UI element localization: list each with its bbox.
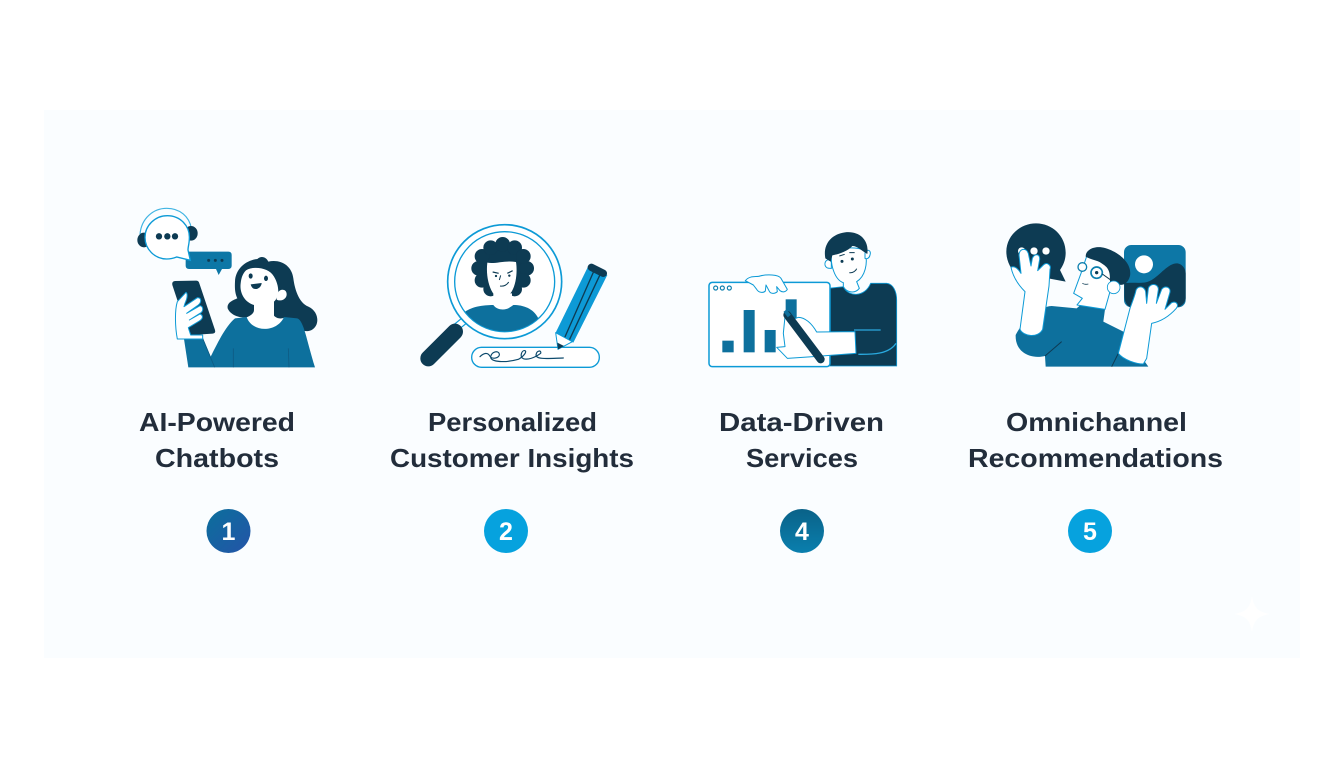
face [487,261,517,298]
small chat bubble [186,252,232,275]
bars [722,341,734,352]
icon: man holding chat bubble and image card [1006,223,1186,367]
hand on phone [175,292,203,339]
face [1074,253,1118,309]
top hand gripping window [745,275,787,293]
heading: Data-Driven Services: Data-Driven [719,407,884,437]
icon: man presenting a bar chart window [709,232,897,367]
heading: AI-Powered Chatbots [139,407,295,473]
chart window [709,282,830,367]
number badge 1 [206,509,250,553]
heading: Data-Driven Services: Services [746,443,858,473]
number badge 2 [484,509,528,553]
signature field [472,347,599,367]
background panel [44,110,1300,658]
signature scribble [480,351,563,362]
number badge 2: 2 [499,518,513,546]
right hand and arm [1118,284,1177,364]
number badge 1: 1 [222,518,236,546]
number badge 4 [780,509,824,553]
arm and hand with pen [777,317,856,358]
curly hair [471,237,534,296]
heading: Omnichannel Recommendations: Recommendations [968,443,1223,473]
face and neck [240,268,284,328]
icon: woman using phone with chatbot bubbles [137,208,317,367]
icon: magnifying glass over customer portrait with pencil [428,225,607,367]
chat bubble [1006,223,1066,282]
phone [172,281,215,335]
torso [828,283,897,366]
sweater [184,317,315,367]
shirt [465,305,538,332]
pencil [556,266,607,349]
sweater [1016,303,1148,367]
ear [1107,281,1120,294]
heading: AI-Powered Chatbots: AI-Powered [139,407,295,437]
number badge 5: 5 [1083,518,1097,546]
left hand and arm [1011,249,1050,335]
glasses [1091,267,1102,278]
heading: Personalized Customer Insights [390,407,634,473]
hair [228,257,317,331]
heading: AI-Powered Chatbots: Chatbots [155,443,279,473]
heading: Omnichannel Recommendations: Omnichannel [1006,407,1187,437]
neck [493,293,512,309]
magnifier handle [456,320,465,327]
lens [448,225,562,339]
image card [1124,245,1186,307]
hair [825,232,868,262]
number badge 4: 4 [795,518,809,546]
number badge 5 [1068,509,1112,553]
heading: Data-Driven Services [719,407,884,473]
heading: Personalized Customer Insights: Personalized [428,407,597,437]
heading: Personalized Customer Insights: Customer Insights [390,443,634,473]
head [831,248,866,292]
headset arc [140,208,191,234]
sparkle watermark [1234,596,1270,632]
hair [1086,247,1130,285]
chatbot speech bubble [145,216,190,260]
heading: Omnichannel Recommendations [968,407,1223,473]
